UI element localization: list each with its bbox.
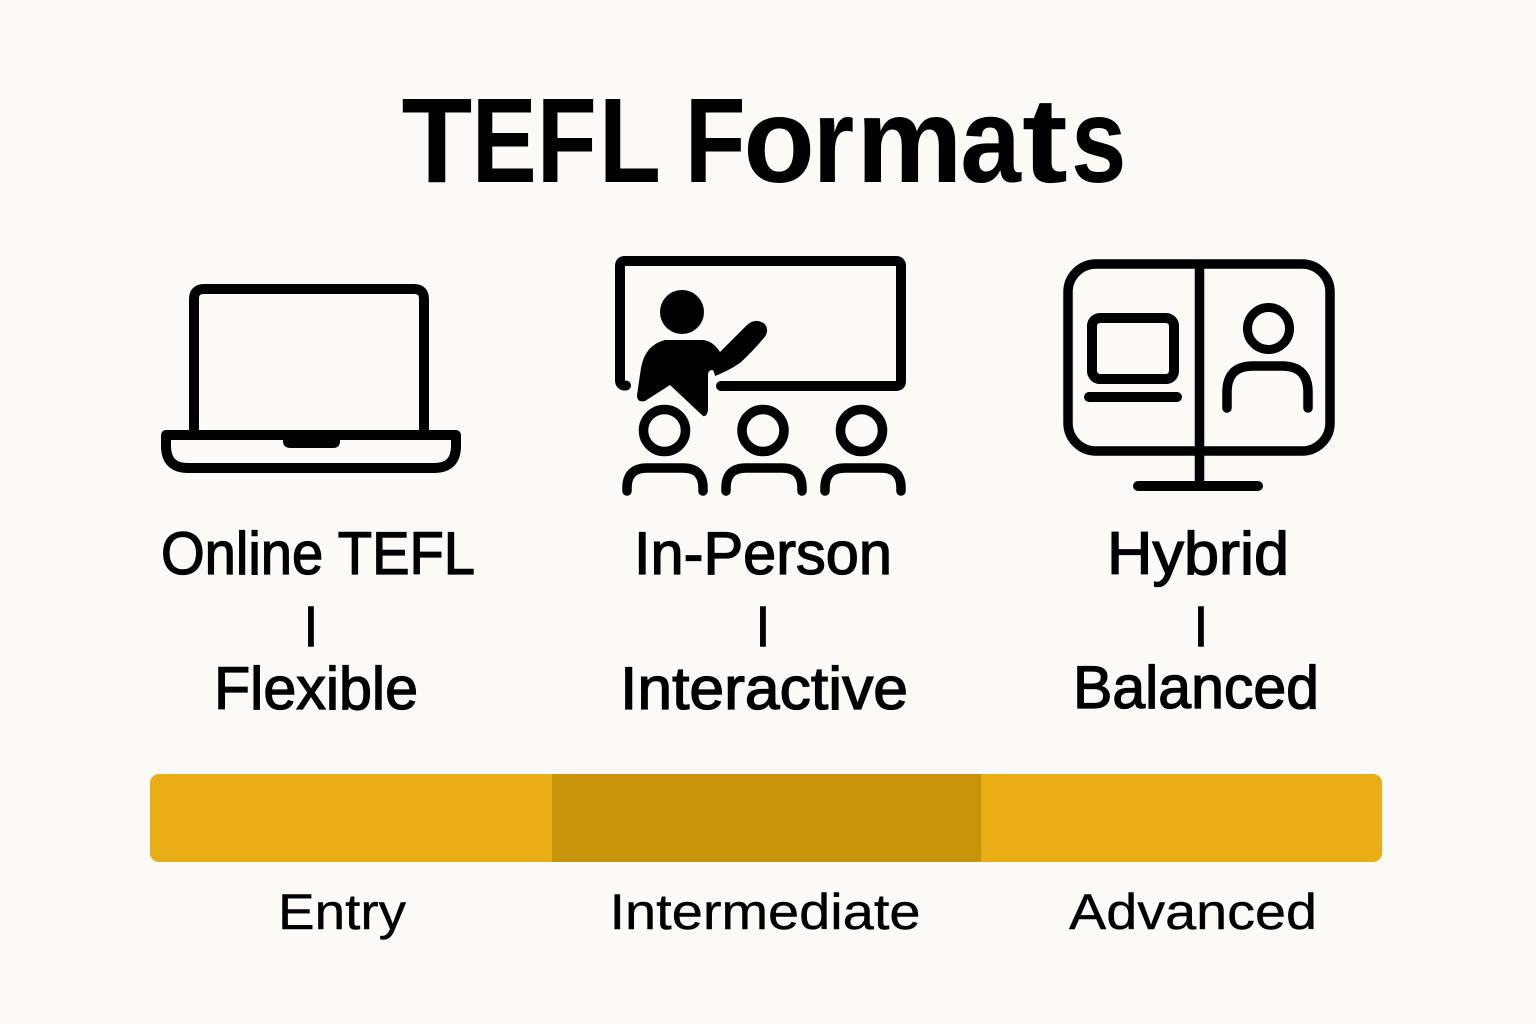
title: r (813, 72, 854, 208)
title: T (402, 72, 472, 208)
title: m (856, 72, 963, 208)
title: L (599, 72, 659, 208)
level labels (278, 884, 1317, 940)
icon: laptop (166, 289, 456, 468)
label: online tefl: Online TEFL (161, 520, 475, 587)
progress bar (150, 774, 1382, 862)
label: in-person (620, 520, 908, 722)
title: t (1022, 72, 1068, 208)
icon: hybrid monitor (1068, 264, 1330, 486)
label: online tefl: | (306, 600, 316, 646)
label: hybrid: Hybrid (1107, 520, 1289, 587)
label: in-person: Interactive (620, 655, 908, 722)
title: E (472, 72, 537, 208)
title: o (743, 72, 815, 208)
label: hybrid (1073, 520, 1319, 721)
title: F (685, 72, 746, 208)
title: s (1071, 72, 1126, 208)
label: online tefl: Flexible (214, 655, 418, 722)
label: in-person: In-Person (634, 520, 892, 587)
level labels: Advanced (1069, 884, 1317, 940)
icon: classroom teacher with students (620, 261, 901, 491)
label: online tefl (161, 520, 475, 722)
title: a (960, 72, 1022, 208)
label: hybrid: Balanced (1073, 654, 1319, 721)
level labels: Intermediate (610, 884, 920, 940)
label: hybrid: | (1196, 600, 1206, 646)
label: in-person: | (758, 600, 768, 646)
level labels: Entry (278, 884, 406, 940)
title: F (537, 72, 597, 208)
